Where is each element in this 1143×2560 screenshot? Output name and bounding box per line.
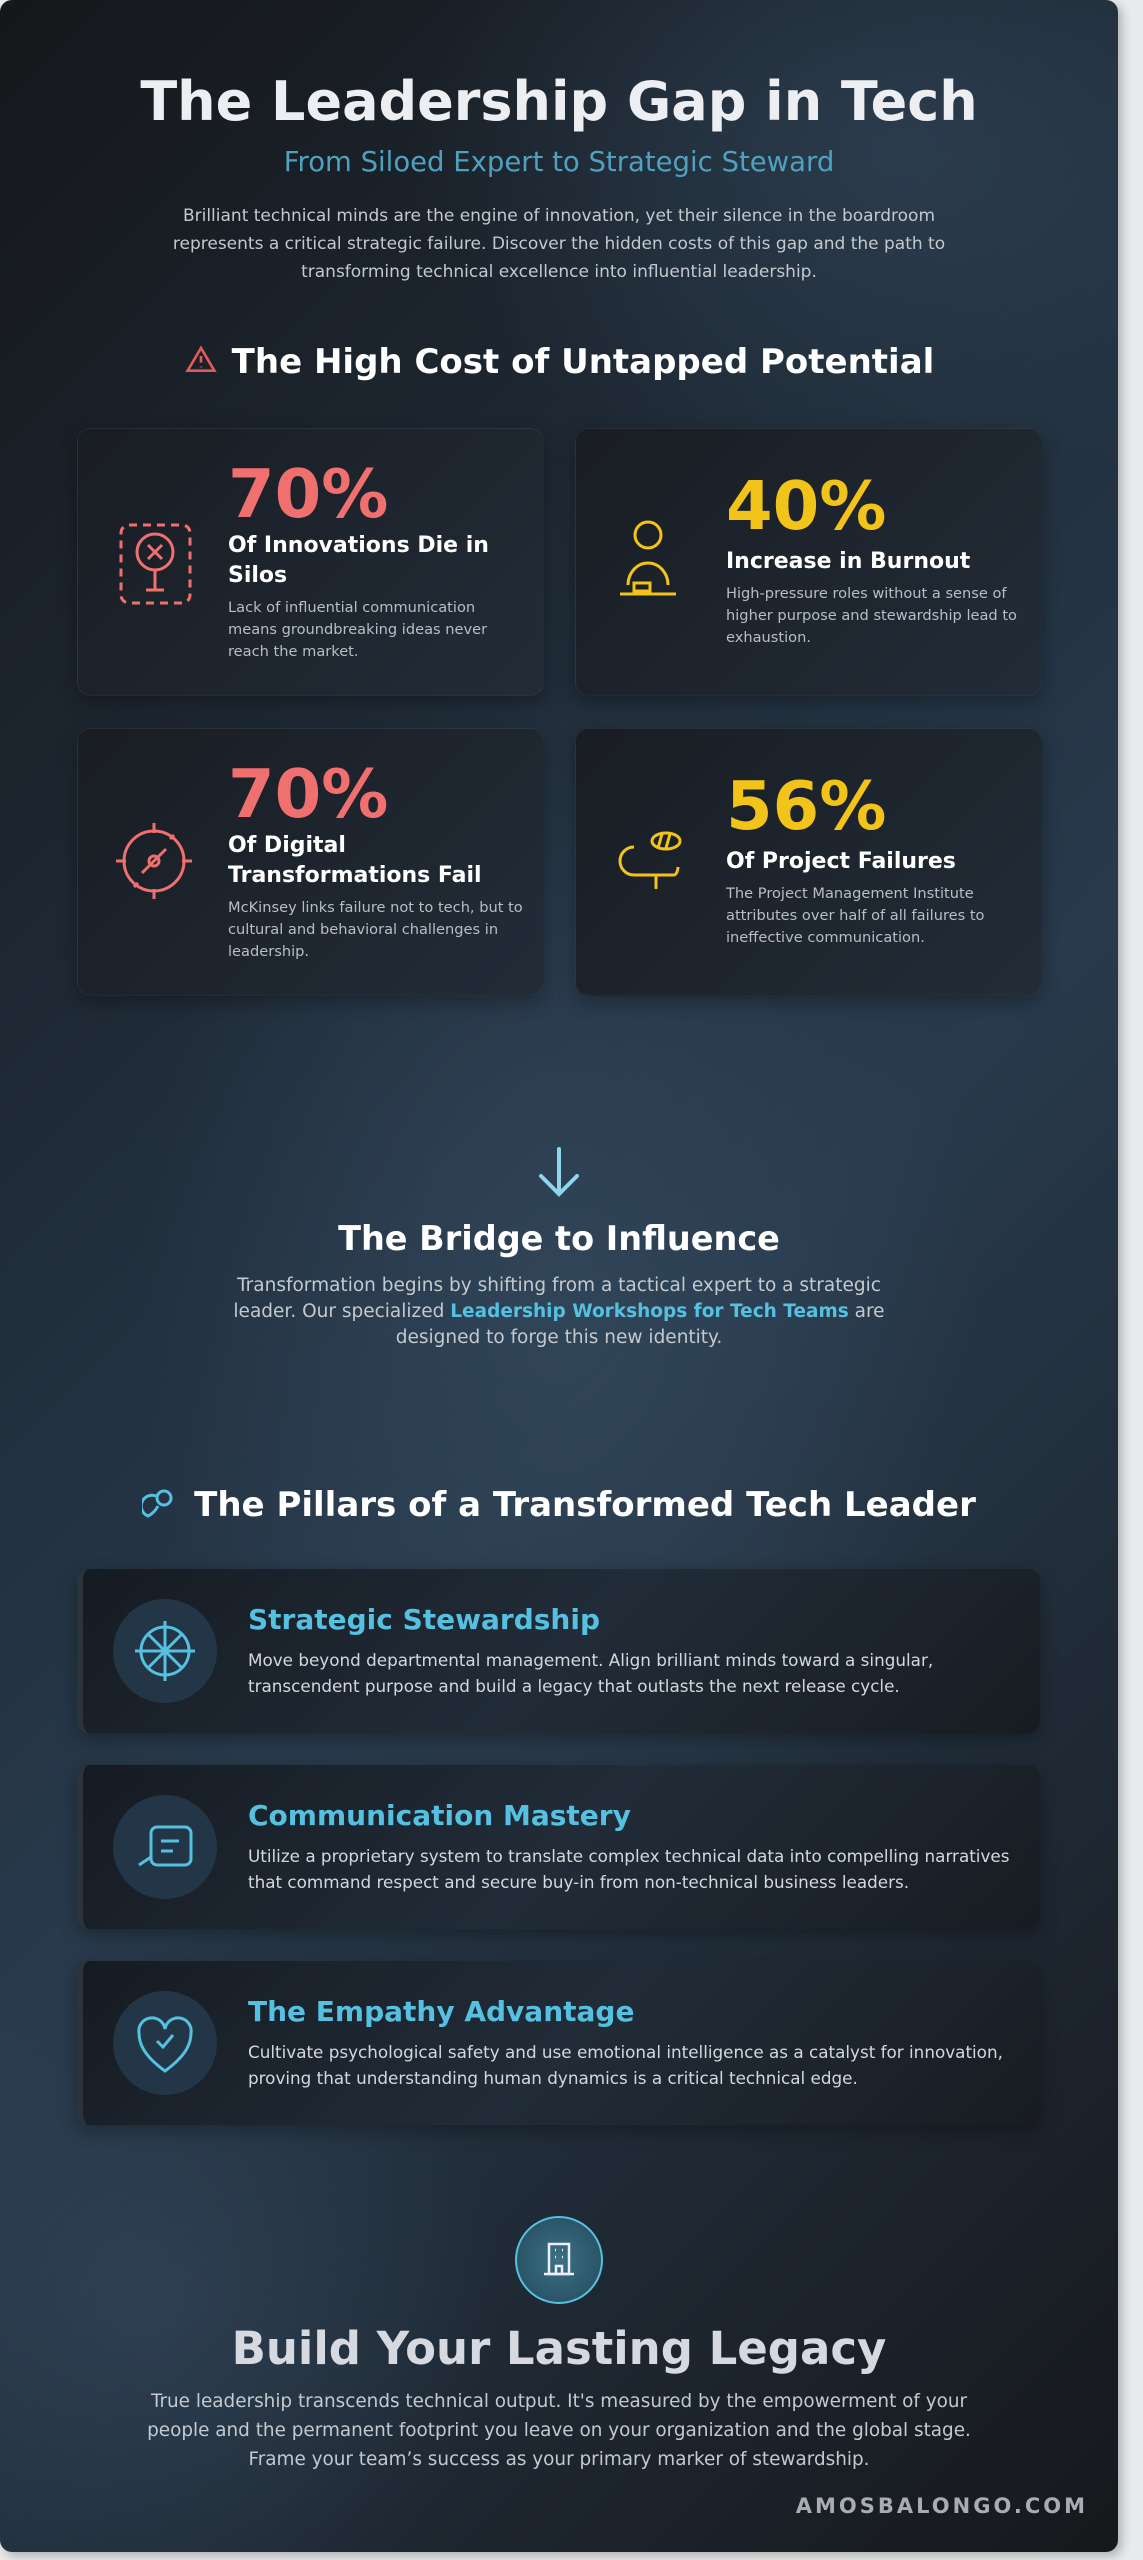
pillar text: Utilize a proprietary system to translate complex technical data into compelling narratives that command respect and secure buy-in from non-technical business leaders. [248, 1846, 1009, 1892]
pillar title: Communication Mastery [248, 1799, 631, 1832]
icon: wheel [113, 1599, 217, 1703]
pillar text: Move beyond departmental management. Align brilliant minds toward a singular, transcendent purpose and build a legacy that outlasts the next release cycle. [248, 1650, 933, 1696]
stat label: Of Innovations Die in Silos [228, 533, 489, 588]
icon: message [113, 1795, 217, 1899]
pillar text: Cultivate psychological safety and use emotional intelligence as a catalyst for innovation, proving that understanding human dynamics is a critical technical edge. [248, 2042, 1003, 2088]
stat description: McKinsey links failure not to tech, but to cultural and behavioral challenges in leadership. [228, 899, 523, 960]
pillar: communication mastery [77, 1765, 1040, 1929]
heading: pillars: The Pillars of a Transformed Tech Leader [194, 1485, 976, 1525]
heading: bridge: The Bridge to Influence [338, 1219, 780, 1258]
bridge paragraph: Transformation begins by shifting from a tactical expert to a strategic leader. Our specialized Leadership Workshops for Tech Teams are designed to forge this new identity. [233, 1275, 885, 1348]
footer brand: AMOSBALONGO.COM [796, 2494, 1088, 2518]
icon: heart [113, 1991, 217, 2095]
card: 56% project failures [575, 728, 1042, 996]
icon: compass [116, 823, 192, 899]
card: 70% innovations [77, 428, 544, 696]
heading: high cost: The High Cost of Untapped Potential [232, 342, 934, 382]
icon: person [620, 520, 676, 596]
stat number: 70% [228, 455, 388, 533]
card: 40% burnout [575, 428, 1042, 696]
stat description: High-pressure roles without a sense of higher purpose and stewardship lead to exhaustion. [726, 585, 1017, 646]
stat number: 40% [726, 467, 886, 545]
stat description: Lack of influential communication means groundbreaking ideas never reach the market. [228, 599, 487, 660]
pillar: empathy advantage [77, 1961, 1040, 2125]
heading: legacy: Build Your Lasting Legacy [232, 2322, 886, 2375]
stat label: Of Project Failures [726, 849, 956, 874]
arrow: down [538, 1147, 580, 1197]
stat number: 70% [228, 755, 388, 833]
stat label: Increase in Burnout [726, 549, 970, 574]
stat description: The Project Management Institute attributes over half of all failures to ineffective communication. [726, 885, 984, 946]
subtitle: From Siloed Expert to Strategic Steward [284, 146, 834, 178]
icon: dashed box [120, 524, 192, 604]
pillar: strategic stewardship [77, 1569, 1040, 1733]
intro paragraph: Brilliant technical minds are the engine of innovation, yet their silence in the boardroom represents a critical strategic failure. Discover the hidden costs of this gap and the path to transforming technical excellence into influential leadership. [173, 206, 945, 282]
stat number: 56% [726, 767, 886, 845]
legacy paragraph: True leadership transcends technical output. It's measured by the empowerment of your people and the permanent footprint you leave on your organization and the global stage. Frame your team’s success as your primary marker of stewardship. [147, 2391, 971, 2470]
pillar title: Strategic Stewardship [248, 1603, 600, 1636]
stat label: Of Digital Transformations Fail [228, 833, 482, 888]
icon: building [515, 2216, 603, 2304]
icon: speech [618, 832, 682, 889]
card: 70% digital transformations [77, 728, 544, 996]
pillar title: The Empathy Advantage [248, 1995, 634, 2028]
title: The Leadership Gap in Tech [140, 70, 978, 133]
